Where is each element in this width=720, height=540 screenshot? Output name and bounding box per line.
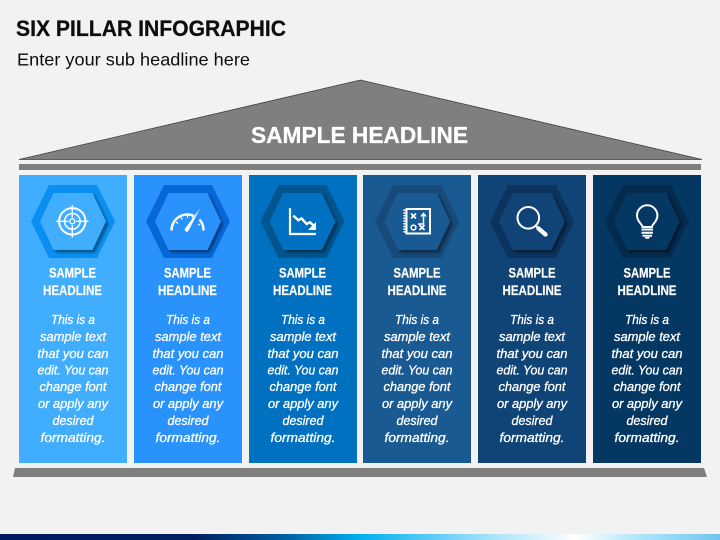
pillar text: change font (498, 380, 566, 394)
pillar text: or apply any (38, 397, 109, 411)
pillar text: This is a (625, 313, 669, 327)
pillar heading: HEADLINE (388, 283, 446, 298)
subtitle: Enter your sub headline here (17, 50, 250, 70)
pillar text: sample text (40, 330, 107, 344)
pillar text: that you can (268, 347, 339, 361)
pillar text: sample text (384, 330, 451, 344)
bottom gradient strip (0, 534, 720, 540)
pillar 2 (134, 175, 242, 463)
pillar text: edit. You can (268, 364, 339, 378)
pillar text: formatting. (614, 431, 680, 445)
pillar text (268, 313, 339, 445)
pillar text: change font (270, 380, 337, 394)
pillar text: change font (614, 380, 681, 394)
pillar heading: SAMPLE (508, 266, 556, 281)
pillar text: edit. You can (612, 364, 683, 378)
pillar text (496, 313, 568, 445)
pillar heading: HEADLINE (273, 283, 332, 298)
pillar text: that you can (382, 347, 453, 361)
pillar heading: SAMPLE (164, 266, 211, 281)
pillar 3 (249, 175, 357, 463)
pillar text: edit. You can (382, 364, 453, 378)
pillar text (612, 313, 683, 445)
pillar heading (618, 266, 676, 298)
pillar text: This is a (281, 313, 325, 327)
pillar text: or apply any (497, 397, 568, 411)
base plinth (13, 468, 707, 477)
hexagon badge 4 (375, 185, 459, 258)
pillar text: or apply any (268, 397, 339, 411)
pillar 4 (363, 175, 471, 463)
hexagon badge 6 (605, 185, 689, 258)
pillar text: change font (384, 380, 451, 394)
pillar text: This is a (51, 313, 95, 327)
pillar heading: HEADLINE (43, 283, 102, 298)
pillar text: that you can (496, 347, 568, 361)
pillar text: sample text (499, 330, 566, 344)
hexagon badge 3 (260, 185, 344, 258)
pillar heading (388, 266, 446, 298)
pillar text: or apply any (382, 397, 453, 411)
pillar text (152, 313, 224, 445)
pillar heading (43, 266, 102, 298)
pillar text: or apply any (612, 397, 683, 411)
pillar heading: SAMPLE (279, 266, 326, 281)
pillar text (38, 313, 109, 445)
title: SIX PILLAR INFOGRAPHIC (16, 16, 286, 41)
pillar text: This is a (395, 313, 439, 327)
pillar text: formatting. (270, 431, 336, 445)
icon: magnifier (518, 207, 546, 234)
pillar heading: HEADLINE (158, 283, 217, 298)
pillar text: formatting. (40, 431, 106, 445)
pillar text: that you can (152, 347, 224, 361)
pillar text: formatting. (156, 431, 220, 445)
pillar heading (273, 266, 332, 298)
pillar text: sample text (155, 330, 222, 344)
pillar text: desired (168, 414, 210, 428)
icon: speedometer (171, 208, 204, 232)
icon: light bulb (637, 205, 657, 239)
pillar text: change font (40, 380, 107, 394)
roof with headline: SAMPLE HEADLINE (251, 122, 468, 148)
pillar text: formatting. (500, 431, 564, 445)
pillar 6 (593, 175, 701, 463)
hexagon badge 5 (490, 185, 574, 258)
pillar text: desired (282, 414, 325, 428)
pillar heading: SAMPLE (624, 266, 670, 281)
pillar text: sample text (270, 330, 337, 344)
pillar text: sample text (614, 330, 681, 344)
icon: strategy board (404, 209, 430, 234)
pillar text: edit. You can (496, 364, 568, 378)
pillar text: This is a (510, 313, 554, 327)
pillar heading: HEADLINE (618, 283, 676, 298)
pillar text: desired (626, 414, 669, 428)
pillar heading (502, 266, 562, 298)
pillar text: desired (396, 414, 439, 428)
pillar text: desired (512, 414, 554, 428)
roof with headline (19, 80, 702, 160)
pillar text (382, 313, 453, 445)
pillar text: edit. You can (38, 364, 109, 378)
icon: target (56, 205, 88, 238)
pillar heading: SAMPLE (49, 266, 96, 281)
pillar heading: SAMPLE (394, 266, 440, 281)
pillar text: or apply any (153, 397, 224, 411)
pillar text: This is a (166, 313, 210, 327)
pillar heading: HEADLINE (502, 283, 562, 298)
pillar text: edit. You can (152, 364, 224, 378)
hexagon badge 2 (146, 185, 230, 258)
pillar text: change font (154, 380, 222, 394)
pillar heading (158, 266, 217, 298)
pillar text: that you can (612, 347, 683, 361)
pillar 5 (478, 175, 586, 463)
beam (19, 164, 701, 170)
pillar text: desired (52, 414, 95, 428)
pillar 1 (19, 175, 127, 463)
icon: falling chart (290, 208, 316, 234)
pillar text: that you can (38, 347, 109, 361)
hexagon badge 1 (31, 185, 115, 258)
pillar text: formatting. (384, 431, 450, 445)
